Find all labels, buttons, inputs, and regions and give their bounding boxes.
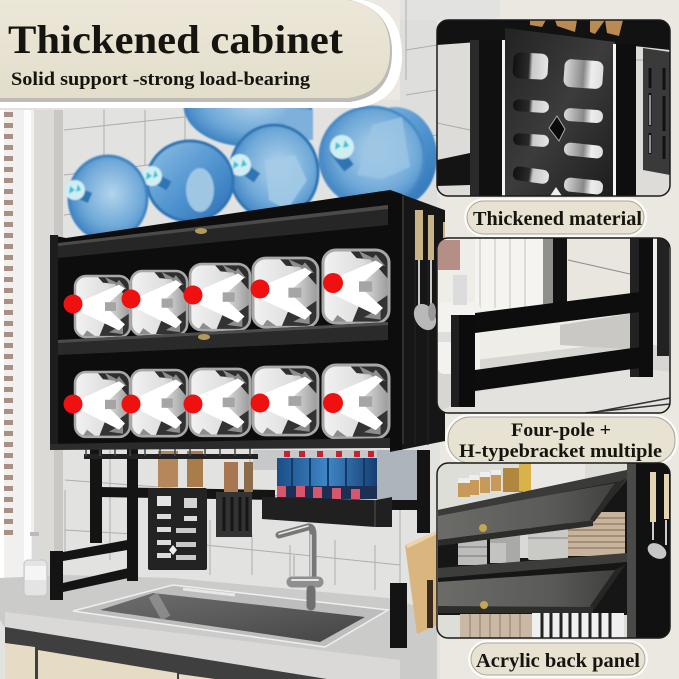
stacked plates [458,512,625,565]
shadow under rack [253,450,417,500]
label: thickened material [464,198,647,237]
label: thickened material: Thickened material [473,209,643,230]
inset frame 3 [437,463,670,638]
main rack [50,190,450,452]
blue bottles on spice shelf [277,451,377,500]
inset frame 2 [437,238,670,413]
lower flap [438,570,615,607]
legs and lower frame [50,447,430,648]
upper flap [438,480,627,540]
plates behind lower flap [465,594,545,608]
spice shelf [262,497,392,527]
front post [459,315,475,407]
slotted panel [502,28,616,196]
plate rack [460,613,624,638]
cutting board [405,531,437,634]
knife handles [530,20,623,36]
knife holder [148,488,207,570]
bottles row 2 [64,365,389,438]
chopstick holder [216,492,252,537]
pink reflection [438,240,460,270]
inset photo: thickened material [437,20,670,196]
glass bottle [438,275,480,374]
label: four-pole bracket: H-typebracket multiple [459,441,662,462]
back posts [553,238,567,306]
soap bottle [24,532,47,596]
interior [438,470,627,615]
water jugs on top of rack [65,65,437,240]
right column backdrop [437,0,679,679]
label: four-pole bracket: Four-pole + [511,420,611,441]
side panel [643,48,670,175]
middle shelf [58,322,388,355]
black frame [437,20,670,50]
top shelf front [58,205,388,258]
inset frame 1 [437,20,670,196]
bottom shelf [50,438,390,450]
right post [616,44,636,196]
wall tiles [64,0,437,600]
top brass knob [195,228,207,234]
rack side panel [390,190,450,452]
middle brass knob [198,334,210,340]
subheading: Solid support -strong load-bearing [11,69,311,90]
H-bars [475,292,640,333]
counter top with sink [0,526,437,679]
inset photo: acrylic back panel [437,463,670,638]
window curtain and blinds [0,110,63,580]
label: acrylic back panel: Acrylic back panel [476,651,641,672]
side panel [657,238,669,356]
inset photo: four-pole bracket [437,238,670,413]
rack body [50,190,402,450]
sink [73,585,388,647]
hanging rail with knives [84,447,258,492]
label: acrylic back panel [468,640,648,678]
bottles row 1 [64,250,389,337]
marble floor [437,345,670,413]
label: four-pole bracket [445,414,678,466]
post and side panel [627,463,670,638]
title banner [0,0,402,108]
spice jars [458,463,531,497]
hanging utensils [409,210,448,334]
middle shelf [438,553,627,578]
heading: Thickened cabinet [8,17,344,62]
faucet [279,526,318,606]
rack left edge [50,235,58,447]
